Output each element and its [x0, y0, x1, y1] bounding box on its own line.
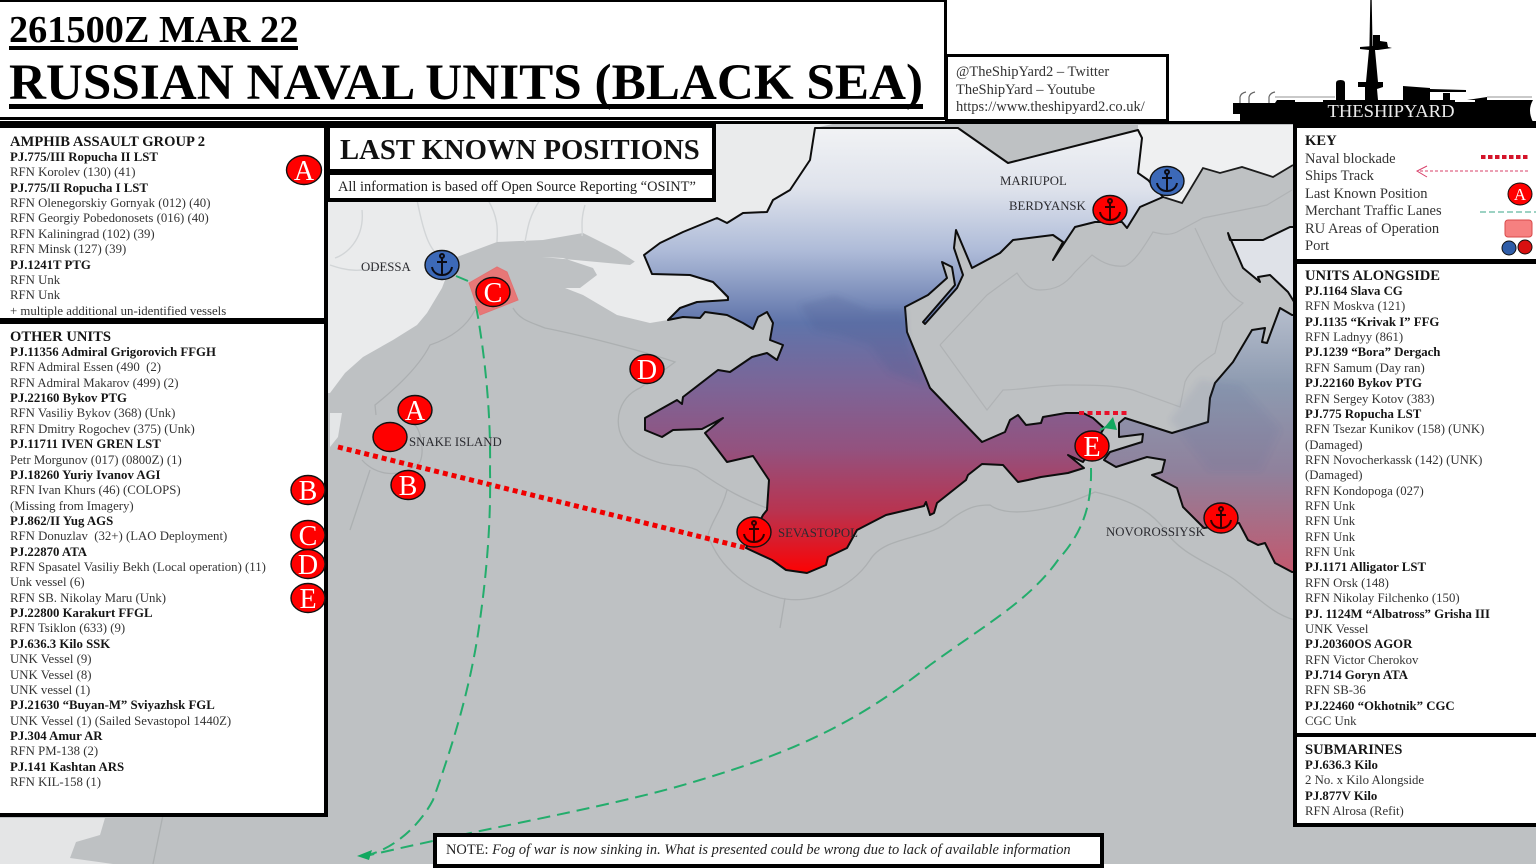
land: west strip — [330, 413, 342, 447]
unit list: RFN Unk — [10, 288, 60, 302]
panel: OSINT note — [326, 171, 716, 202]
key labels: Merchant Traffic Lanes — [1305, 203, 1442, 219]
marker: D — [630, 354, 664, 386]
marker: B — [391, 470, 425, 502]
unit list: PJ.775 Ropucha LST — [1305, 407, 1421, 421]
unit list: RFN Moskva (121) — [1305, 299, 1405, 313]
badge C: C — [299, 521, 317, 552]
port: Odessa — [425, 250, 459, 280]
unit list — [1305, 284, 1490, 728]
unit list: RFN Korolev (130) (41) — [10, 165, 135, 179]
unit list: (Missing from Imagery) — [10, 499, 134, 513]
unit list: UNK Vessel (1) (Sailed Sevastopol 1440Z) — [10, 714, 231, 728]
unit list: Petr Morgunov (017) (0800Z) (1) — [10, 453, 182, 467]
marker: C — [476, 278, 510, 309]
submarine list: RFN Alrosa (Refit) — [1305, 804, 1404, 818]
white header band — [0, 0, 1536, 124]
Russia east gradient — [1104, 308, 1300, 572]
panel: units alongside — [1293, 260, 1536, 737]
rivers and borders — [330, 200, 585, 270]
title panel — [0, 0, 947, 120]
badge D: D — [298, 550, 318, 581]
badge B: B — [299, 476, 317, 507]
marker: C: C — [484, 278, 502, 309]
unit list: RFN Spasatel Vasiliy Bekh (Local operation) (11) — [10, 560, 266, 574]
place labels: SNAKE ISLAND — [409, 435, 502, 449]
terrain shading — [800, 295, 1280, 470]
Crimea and southern Ukraine occupied gradient — [644, 128, 1163, 573]
unit list: PJ.11356 Admiral Grigorovich FFGH — [10, 345, 216, 359]
unit list: RFN Sergey Kotov (383) — [1305, 392, 1435, 406]
key labels: Ships Track — [1305, 168, 1374, 184]
marker: A — [398, 396, 432, 427]
unit list: UNK Vessel (9) — [10, 652, 92, 666]
unit list: RFN Unk — [10, 273, 60, 287]
panel: last known positions — [326, 124, 716, 173]
unit list: RFN Unk — [1305, 530, 1355, 544]
unit list: RFN Tsezar Kunikov (158) (UNK) — [1305, 422, 1484, 436]
land: Ukraine west — [300, 120, 850, 393]
key heading: KEY — [1305, 133, 1337, 149]
note: fog of war: NOTE: Fog of war is now sinking in. What is presented could be wrong due to lack of available information — [446, 842, 1071, 858]
unit list: RFN SB-36 — [1305, 683, 1366, 697]
unit list: RFN Vasiliy Bykov (368) (Unk) — [10, 406, 175, 420]
Russia coast pocket — [1228, 227, 1296, 305]
place labels: MARIUPOL — [1000, 174, 1067, 188]
unit list: UNK vessel (1) — [10, 683, 90, 697]
unit list: PJ.22160 Bykov PTG — [1305, 376, 1422, 390]
Snake Island marker — [373, 422, 407, 452]
unit list: PJ.22160 Bykov PTG — [10, 391, 127, 405]
unit list: PJ.22870 ATA — [10, 545, 87, 559]
panel: submarines — [1293, 733, 1536, 827]
unit list: PJ.775/II Ropucha I LST — [10, 181, 148, 195]
unit list: PJ.862/II Yug AGS — [10, 514, 113, 528]
social handles: @TheShipYard2 – Twitter — [956, 64, 1109, 80]
heading: SUBMARINES — [1305, 742, 1402, 758]
unit list: PJ. 1124M “Albatross” Grisha III — [1305, 607, 1490, 621]
land: Russia north east — [1138, 125, 1293, 203]
land: Kinburn coast — [542, 255, 728, 323]
unit list: RFN Samum (Day ran) — [1305, 361, 1425, 375]
naval blockade line Kerch — [1079, 411, 1127, 415]
unit list: RFN Nikolay Filchenko (150) — [1305, 591, 1460, 605]
heading: OTHER UNITS — [10, 329, 111, 345]
unit list — [10, 150, 226, 318]
submarine list: PJ.636.3 Kilo — [1305, 758, 1378, 772]
main title: RUSSIAN NAVAL UNITS (BLACK SEA) — [9, 54, 923, 111]
unit list: PJ.775/III Ropucha II LST — [10, 150, 158, 164]
unit list: RFN PM-138 (2) — [10, 744, 98, 758]
badge D — [290, 548, 326, 581]
place labels — [361, 174, 1206, 540]
naval blockade line west — [338, 447, 746, 548]
arrow at Kerch — [1100, 417, 1117, 430]
badge A: A — [294, 156, 315, 187]
badge A — [286, 154, 322, 187]
unit list: PJ.11711 IVEN GREN LST — [10, 437, 161, 451]
panel: amphibious assault group — [0, 124, 328, 322]
unit list: RFN Olenegorskiy Gornyak (012) (40) — [10, 196, 210, 210]
Russia north coast line — [1163, 165, 1293, 203]
unit list: RFN Minsk (127) (39) — [10, 242, 126, 256]
unit list: RFN Kondopoga (027) — [1305, 484, 1424, 498]
badge B — [290, 474, 326, 507]
marker: D: D — [637, 355, 657, 386]
badge C — [290, 520, 326, 552]
social handles: TheShipYard – Youtube — [956, 82, 1095, 98]
unit list: RFN Unk — [1305, 545, 1355, 559]
social handles: https://www.theshipyard2.co.uk/ — [956, 99, 1145, 115]
unit list: RFN Tsiklon (633) (9) — [10, 621, 125, 635]
unit list: PJ.1164 Slava CG — [1305, 284, 1403, 298]
key labels: Naval blockade — [1305, 151, 1396, 167]
unit list: + multiple additional un-identified vessels — [10, 304, 226, 318]
place labels: SEVASTOPOL — [778, 526, 858, 540]
unit list: RFN Victor Cherokov — [1305, 653, 1418, 667]
marker: A: A — [405, 396, 426, 427]
unit list: Unk vessel (6) — [10, 575, 85, 589]
date heading: 261500Z MAR 22 — [9, 9, 298, 51]
heading: AMPHIB ASSAULT GROUP 2 — [10, 134, 205, 150]
unit list: RFN KIL-158 (1) — [10, 775, 101, 789]
land: bottom left — [0, 818, 113, 864]
azov sea boundaries — [940, 190, 1292, 410]
unit list: RFN Kaliningrad (102) (39) — [10, 227, 155, 241]
unit list: PJ.1171 Alligator LST — [1305, 560, 1426, 574]
port: Mariupol — [1150, 166, 1184, 196]
note: fog of war — [433, 833, 1104, 868]
unit list: RFN Novocherkassk (142) (UNK) — [1305, 453, 1482, 467]
port: Novorossiysk — [1204, 503, 1238, 533]
unit list: PJ.21630 “Buyan-M” Sviyazhsk FGL — [10, 698, 215, 712]
logo wordmark: THESHIPYARD — [1328, 101, 1454, 121]
unit list: PJ.1135 “Krivak I” FFG — [1305, 315, 1439, 329]
unit list: RFN Orsk (148) — [1305, 576, 1389, 590]
heading: UNITS ALONGSIDE — [1305, 268, 1440, 284]
unit list: RFN Ladnyy (861) — [1305, 330, 1403, 344]
place labels: BERDYANSK — [1009, 199, 1087, 213]
unit list: PJ.636.3 Kilo SSK — [10, 637, 110, 651]
merchant lanes — [368, 276, 1091, 855]
unit list: RFN Ivan Khurs (46) (COLOPS) — [10, 483, 181, 497]
unit list: PJ.22460 “Okhotnik” CGC — [1305, 699, 1455, 713]
unit list: RFN Dmitry Rogochev (375) (Unk) — [10, 422, 195, 436]
unit list: PJ.714 Goryn ATA — [1305, 668, 1408, 682]
unit list: PJ.141 Kashtan ARS — [10, 760, 124, 774]
unit list: PJ.1239 “Bora” Dergach — [1305, 345, 1440, 359]
area of operation C — [469, 267, 518, 315]
unit list: RFN Unk — [1305, 514, 1355, 528]
submarine list: 2 No. x Kilo Alongside — [1305, 773, 1424, 787]
place labels: NOVOROSSIYSK — [1106, 525, 1206, 539]
badge E: E — [299, 584, 317, 615]
unit list: RFN Unk — [1305, 499, 1355, 513]
unit list: RFN Donuzlav (32+) (LAO Deployment) — [10, 529, 227, 543]
unit list: PJ.304 Amur AR — [10, 729, 103, 743]
unit list — [10, 345, 266, 789]
key labels: Port — [1305, 238, 1329, 254]
unit list: RFN SB. Nikolay Maru (Unk) — [10, 591, 166, 605]
place labels: ODESSA — [361, 260, 412, 274]
unit list: RFN Georgiy Pobedonosets (016) (40) — [10, 211, 209, 225]
unit list: CGC Unk — [1305, 714, 1357, 728]
panel: OSINT note: All information is based off Open Source Reporting “OSINT” — [338, 179, 696, 195]
unit list: RFN Admiral Makarov (499) (2) — [10, 376, 178, 390]
key labels: RU Areas of Operation — [1305, 221, 1439, 237]
unit list: UNK Vessel (8) — [10, 668, 92, 682]
key labels: Last Known Position — [1305, 186, 1427, 202]
ship logo — [1233, 0, 1533, 121]
unit list: PJ.22800 Karakurt FFGL — [10, 606, 153, 620]
panel: key — [1293, 124, 1536, 263]
key labels — [1305, 151, 1442, 254]
key symbols: A — [1514, 185, 1527, 204]
badge E — [290, 582, 326, 615]
port: Sevastopol — [737, 517, 771, 547]
unit list: (Damaged) — [1305, 438, 1363, 452]
social handles — [945, 54, 1169, 122]
unit list: PJ.20360OS AGOR — [1305, 637, 1412, 651]
unit list: UNK Vessel — [1305, 622, 1368, 636]
submarine list — [1305, 758, 1424, 818]
panel: last known positions: LAST KNOWN POSITIONS — [340, 134, 700, 166]
unit list: PJ.18260 Yuriy Ivanov AGI — [10, 468, 161, 482]
key symbols — [1416, 155, 1536, 256]
unit list: RFN Admiral Essen (490 (2) — [10, 360, 161, 374]
port: Berdyansk — [1093, 196, 1127, 224]
submarine list: PJ.877V Kilo — [1305, 789, 1377, 803]
unit list: PJ.1241T PTG — [10, 258, 91, 272]
arrowhead — [357, 850, 372, 860]
marker: B: B — [399, 471, 417, 502]
unit list: (Damaged) — [1305, 468, 1363, 482]
panel: other units — [0, 320, 328, 817]
maritime boundaries — [153, 308, 1295, 864]
marker: E: E — [1083, 432, 1101, 463]
marker: E — [1075, 431, 1109, 463]
